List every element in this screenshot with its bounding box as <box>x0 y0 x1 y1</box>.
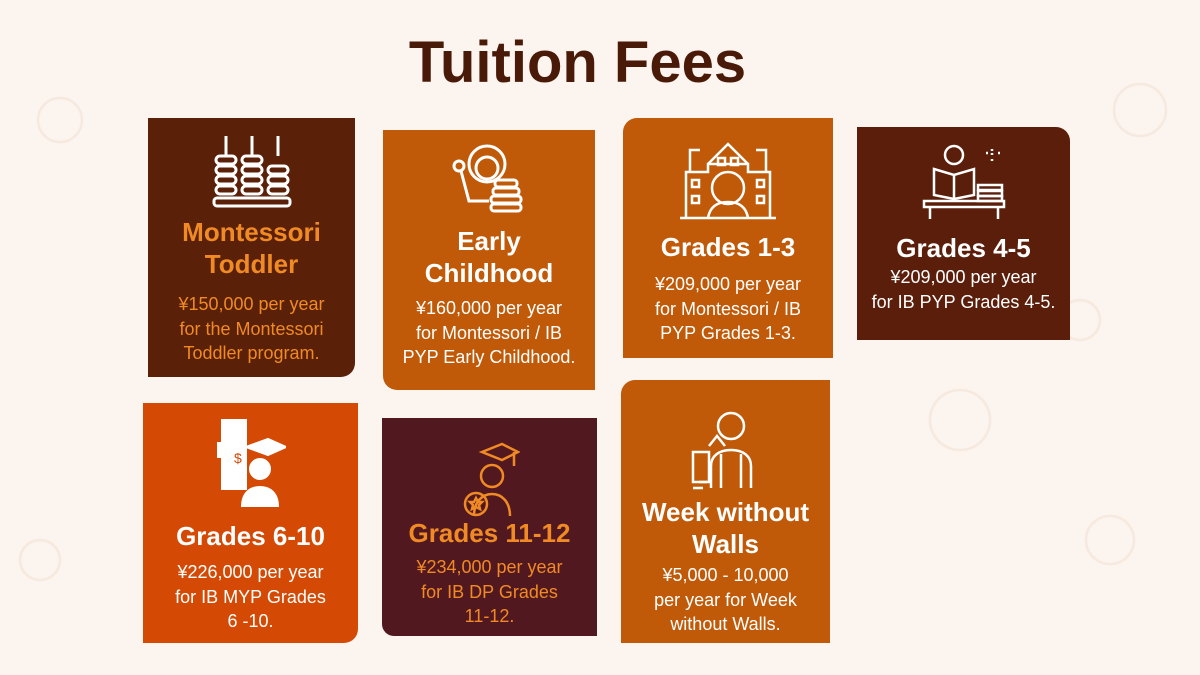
panel: Early Childhood <box>383 130 595 390</box>
text block: for IB PYP Grades 4-5. <box>872 292 1055 312</box>
text block: for IB MYP Grades <box>175 586 326 606</box>
heading: Montessori <box>182 217 321 247</box>
heading <box>182 217 321 279</box>
text block: ¥150,000 per year <box>178 294 325 314</box>
panel: Week without Walls <box>621 380 830 643</box>
heading: Walls <box>692 529 759 559</box>
text block: 6 -10. <box>227 611 274 631</box>
heading <box>425 226 553 288</box>
text block: PYP Early Childhood. <box>403 347 575 367</box>
heading: Week without <box>642 497 809 527</box>
icon: child with toy <box>452 144 522 212</box>
panel: Grades 11-12 <box>382 418 597 636</box>
text block <box>175 562 326 631</box>
panel: Grades 6-10 <box>143 403 358 643</box>
heading: Grades 1-3 <box>661 232 795 262</box>
text block: ¥209,000 per year <box>890 267 1037 287</box>
icon: school building with child <box>680 142 776 220</box>
panel: Montessori Toddler <box>148 118 355 377</box>
text block: ¥5,000 - 10,000 <box>662 565 789 585</box>
panel: Grades 4-5 <box>857 127 1070 340</box>
icon: graduate with fee: $ <box>234 450 242 466</box>
text block: ¥234,000 per year <box>416 557 563 577</box>
heading: Childhood <box>425 258 553 288</box>
icon: graduate with star badge <box>464 442 520 516</box>
text block <box>654 565 797 634</box>
text block: for Montessori / IB <box>416 322 562 342</box>
heading: Grades 6-10 <box>176 521 325 551</box>
text block: ¥226,000 per year <box>177 562 324 582</box>
text block <box>416 557 563 626</box>
title: Tuition Fees <box>409 30 746 95</box>
icon: traveller with backpack <box>692 412 752 490</box>
panel: Grades 1-3 <box>623 118 833 358</box>
icon: reading student at desk <box>922 144 1006 219</box>
heading: Toddler <box>205 249 298 279</box>
text block <box>178 294 325 363</box>
icon: graduate with fee <box>217 419 286 507</box>
text block: for the Montessori <box>179 318 324 338</box>
text block: for IB DP Grades <box>421 582 558 602</box>
text block: for Montessori / IB <box>655 298 801 318</box>
heading: Grades 4-5 <box>896 233 1031 263</box>
text block <box>872 267 1055 312</box>
text block: ¥209,000 per year <box>655 274 801 294</box>
text block: without Walls. <box>670 614 781 634</box>
heading: Grades 11-12 <box>409 518 570 548</box>
heading <box>642 497 809 559</box>
text block: ¥160,000 per year <box>416 298 562 318</box>
text block: per year for Week <box>654 590 797 610</box>
text block: PYP Grades 1-3. <box>660 323 796 343</box>
text block: 11-12. <box>465 606 514 626</box>
text block <box>655 274 801 343</box>
icon: abacus <box>212 136 292 208</box>
text block <box>403 298 575 367</box>
text block: Toddler program. <box>183 343 320 363</box>
heading: Early <box>457 226 521 256</box>
